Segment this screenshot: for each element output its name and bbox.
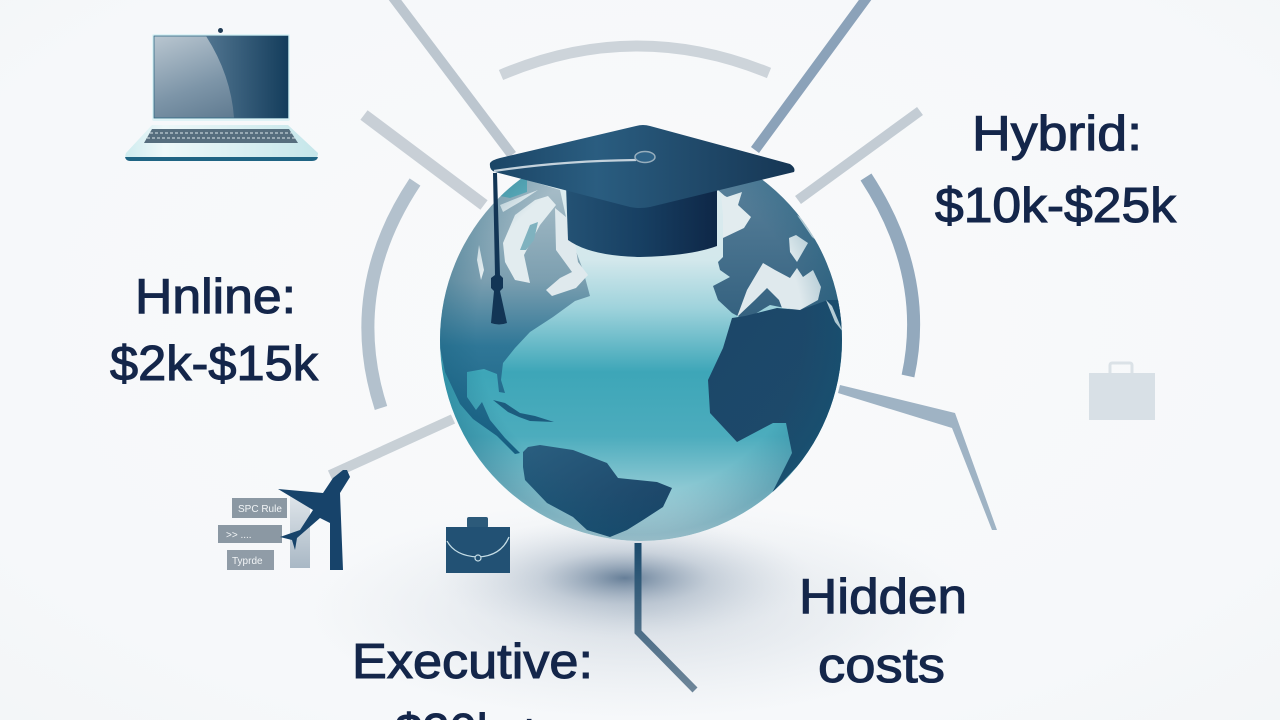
plane body and tail column <box>278 470 350 570</box>
globe: northern teal cap <box>500 178 527 198</box>
laptop: front edge <box>125 157 318 161</box>
right arc <box>866 177 914 376</box>
icon: airplane with signs: SPC Rule <box>238 504 282 515</box>
globe: africa <box>708 300 842 492</box>
globe: south america <box>523 445 672 537</box>
globe: scandinavian highlight <box>789 235 808 262</box>
sign: middle <box>218 525 282 543</box>
cap: mortarboard <box>490 125 794 208</box>
label: hidden costs: Hidden <box>799 570 967 624</box>
label: hybrid <box>935 107 1177 233</box>
cap: base <box>566 185 717 257</box>
sign: top <box>232 498 287 518</box>
connector: upper right <box>798 111 920 200</box>
connector: top left <box>392 0 512 155</box>
label: hybrid: Hybrid: <box>972 107 1142 161</box>
label: hidden costs: costs <box>818 639 945 693</box>
label: hybrid: $10k-$25k <box>935 179 1177 233</box>
icon: faded briefcase <box>1089 363 1155 420</box>
icon: airplane with signs: Typrde <box>232 556 263 567</box>
globe: rim shading <box>440 139 842 541</box>
label: online: $2k-$15k <box>110 337 319 391</box>
globe: arctic white streaks <box>477 190 538 280</box>
plane tower light <box>290 495 310 568</box>
connector: bottom <box>638 543 695 690</box>
connector: upper left <box>364 115 484 205</box>
globe: iberian highlight <box>721 192 751 238</box>
globe: cuba and caribbean <box>493 400 554 422</box>
globe: europe and asia <box>713 180 842 324</box>
globe: canadian islands <box>546 208 588 296</box>
laptop: screen <box>154 36 288 118</box>
faded briefcase: body <box>1089 373 1155 420</box>
left arc <box>368 182 415 408</box>
icon: briefcase <box>446 517 510 573</box>
globe: arctic ice patches <box>503 196 556 283</box>
laptop: webcam <box>218 28 223 33</box>
graduation cap <box>490 125 794 324</box>
briefcase: clasp line <box>447 537 509 557</box>
icon: airplane with signs <box>218 470 350 570</box>
laptop: lid <box>152 34 290 121</box>
cap: button <box>635 152 655 162</box>
label: hidden costs <box>799 570 967 693</box>
faded briefcase: handle <box>1110 363 1132 375</box>
label: executive: Executive: <box>352 635 593 689</box>
icon: airplane with signs: >> .... <box>226 530 252 541</box>
cap: tassel <box>491 173 507 324</box>
connector: lower left <box>330 419 453 475</box>
ground shadow under globe <box>435 518 815 638</box>
icon: laptop <box>125 28 318 161</box>
globe: north america <box>430 170 590 454</box>
globe: right rim streaks <box>797 215 843 332</box>
cap: tassel cord <box>494 160 636 171</box>
label: executive <box>352 635 593 720</box>
connector: top right <box>755 0 868 150</box>
globe <box>440 178 842 541</box>
connector: lower right <box>838 385 997 530</box>
label: online <box>110 270 319 391</box>
laptop: keyboard <box>144 129 298 143</box>
sign: bottom <box>227 550 274 570</box>
laptop: deck <box>125 125 318 158</box>
label: online: Hnline: <box>135 270 296 324</box>
wide ground haze <box>300 500 980 720</box>
briefcase: body <box>446 527 510 573</box>
top arc <box>501 46 769 75</box>
globe: hudson bay <box>520 222 538 250</box>
briefcase: handle <box>467 517 488 528</box>
globe: mediterranean light coast <box>737 263 821 317</box>
